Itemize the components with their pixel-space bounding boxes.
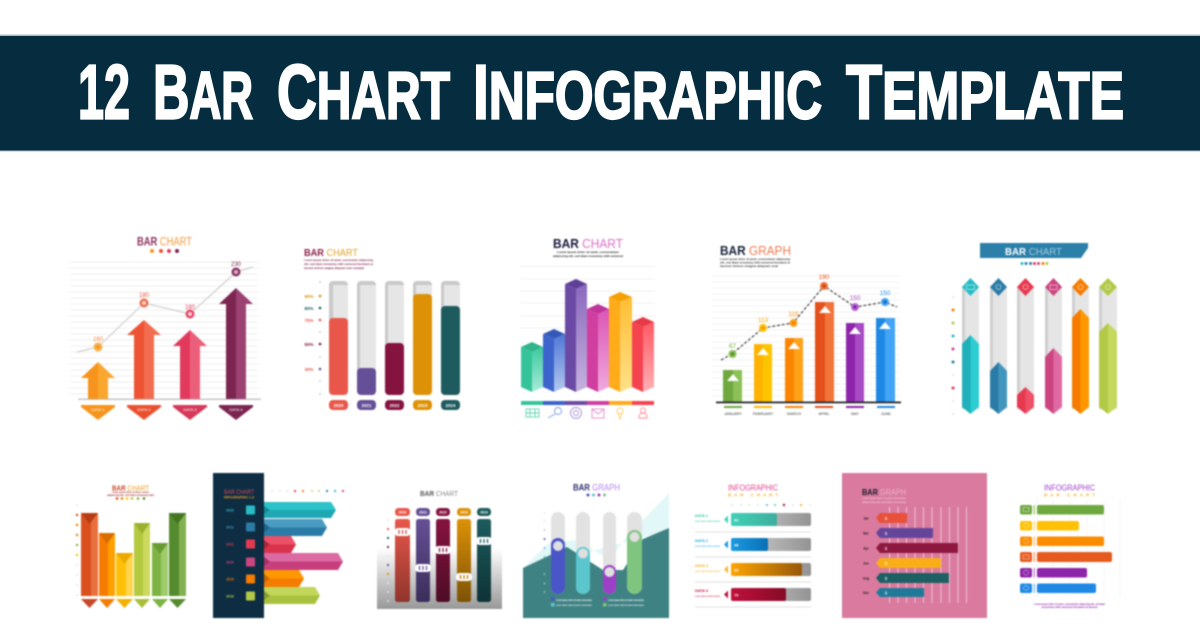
heading dots <box>586 494 606 496</box>
value labels: 115 <box>788 311 799 318</box>
row 1: DATA 1 <box>695 514 708 518</box>
description <box>862 496 907 504</box>
bar icons: $ <box>885 590 888 596</box>
row 1 <box>695 513 811 526</box>
arrow bar 6 <box>264 587 320 604</box>
hex bar 1 <box>962 335 979 414</box>
year pills: 2020 <box>333 403 344 408</box>
scale: 75% <box>304 318 314 323</box>
bar icons: $ <box>885 561 888 566</box>
bar icons: $ <box>885 576 888 581</box>
description <box>107 490 154 497</box>
month legend: FEBRUARY <box>753 412 774 416</box>
arrow bar 4 <box>264 553 343 570</box>
bar 5 <box>152 543 168 596</box>
year pills: 2024 <box>445 403 456 408</box>
teal landscape <box>523 528 669 618</box>
legend: Lorem ipsum dolor sit amet consectetur <box>556 599 592 602</box>
panel heading: INFOGRAPHIC 1-3 <box>224 496 254 500</box>
row labels and icons: 2020 <box>226 560 234 564</box>
bar 2 <box>99 533 115 596</box>
hex bar 6 <box>1099 323 1117 414</box>
chart 12: coloured horizontal bars <box>1020 482 1120 609</box>
heading <box>1044 482 1095 498</box>
row labels: Nov <box>863 591 869 595</box>
category tags: DATA 2 <box>137 407 151 412</box>
description: Lorem ipsum dolor sit amet, consectetuer adipiscing <box>720 257 790 261</box>
category tags: DATA 3 <box>183 407 197 412</box>
pale backdrop <box>523 493 669 570</box>
month legend: JANUARY <box>724 412 742 416</box>
slider handles <box>394 528 492 581</box>
caption: nonummy nibh euismod tincidunt ut laoreet <box>1042 605 1098 609</box>
caption <box>1034 602 1105 609</box>
title <box>78 50 1124 136</box>
value labels: 190 <box>819 274 830 281</box>
value labels: 67 <box>729 343 736 350</box>
title: 12 <box>78 50 130 136</box>
legend: Lorem ipsum dolor sit amet consectetur <box>608 599 644 602</box>
heading: INFOGRAPHIC <box>728 482 778 492</box>
legend: Lorem ipsum dolor sit amet consectetur <box>556 604 592 607</box>
bar 6 <box>169 513 186 596</box>
year pills: 2022 <box>439 510 447 514</box>
bar 3 <box>565 279 587 392</box>
arrow 4 <box>219 288 253 399</box>
scale: 30% <box>304 367 314 372</box>
year pills <box>329 400 460 410</box>
arrow 2 <box>127 320 161 399</box>
icon row <box>526 408 647 419</box>
value labels: 160 <box>93 337 104 343</box>
month legend: MAY <box>851 412 859 416</box>
bars <box>723 302 895 402</box>
heading: BAR CHART <box>1044 492 1095 498</box>
heading: INFOGRAPHIC <box>1044 482 1095 492</box>
year pills: 2023 <box>417 403 428 408</box>
description: Lorem ipsum dolor sit amet consectetur <box>862 496 906 500</box>
trend line <box>77 267 253 352</box>
category tags: DATA 4 <box>229 407 243 412</box>
chart 10: horizontal progress bars <box>695 482 811 607</box>
heading: BAR GRAPH <box>720 243 791 258</box>
bar 4 <box>587 304 609 392</box>
panel heading: BAR CHART <box>224 490 254 496</box>
row 4: 70 <box>734 592 739 598</box>
row 4 <box>695 588 811 601</box>
row labels: Mar <box>863 532 870 536</box>
row 1: Lorem ipsum dolor sit amet <box>695 519 720 523</box>
year pills: 2023 <box>460 510 468 514</box>
year pills: 2024 <box>480 510 488 514</box>
title: BAR <box>153 50 253 136</box>
row labels: Apr <box>863 546 869 550</box>
heading: BAR CHART <box>728 492 778 498</box>
baseline <box>78 398 261 400</box>
row 4: Lorem ipsum dolor sit amet <box>695 594 720 598</box>
row labels and icons <box>226 506 255 600</box>
trend markers <box>94 268 240 352</box>
legend: Lorem ipsum dolor sit amet consectetur <box>608 604 644 607</box>
description: adipiscing elit, sed diam nonummy nibh <box>107 493 154 497</box>
row 2: Lorem ipsum dolor sit amet <box>695 544 720 548</box>
month legend: MARCH <box>787 412 801 416</box>
bar icons: $ <box>885 546 888 551</box>
bar 3 <box>116 553 133 596</box>
row labels and icons: 2021 <box>226 542 234 546</box>
row 3: Lorem ipsum dolor sit amet <box>695 569 720 573</box>
arrow bar 2 <box>264 519 327 536</box>
banner dots <box>1020 262 1048 265</box>
arrow 3 <box>173 330 207 399</box>
chart 11: pink panel bar graph <box>842 473 987 618</box>
value labels <box>729 274 891 350</box>
heading: BAR CHART <box>112 484 149 492</box>
top dots <box>731 504 811 506</box>
description: elit, sed diam nonummy nibh euismod tincidunt ut <box>304 262 373 266</box>
heading: BAR GRAPH <box>573 482 620 492</box>
heading: BAR GRAPH <box>862 487 906 497</box>
banner heading <box>980 243 1088 258</box>
colour strip <box>521 401 654 405</box>
value labels: 150 <box>880 290 891 297</box>
scale <box>304 281 321 395</box>
value labels: 150 <box>850 295 861 302</box>
description: Lorem ipsum dolor sit amet, consectetur adipiscing <box>304 258 373 262</box>
row 3: 90 <box>734 568 739 572</box>
value labels: 180 <box>139 293 150 299</box>
description: laoreet dolore magna aliquam erat volutpat <box>304 266 364 270</box>
category tags: DATA 1 <box>91 407 105 412</box>
gray backdrop <box>377 548 502 609</box>
chart 5: hexagon column chart <box>952 243 1117 415</box>
banner heading: BAR CHART <box>1005 247 1062 258</box>
chart 4: bar and line graph <box>712 243 901 416</box>
legend <box>551 597 644 607</box>
bar icons: $ <box>885 531 888 536</box>
row 2: 45 <box>734 542 739 548</box>
separator ticks <box>1034 505 1035 593</box>
bar 1 <box>81 513 98 596</box>
value labels: 113 <box>758 317 769 324</box>
value labels: 160 <box>185 305 196 311</box>
bottom tags <box>81 599 186 608</box>
month legend: APRIL <box>819 412 829 416</box>
chart 2: progress column chart <box>304 247 460 410</box>
trend markers <box>728 282 889 358</box>
row labels: Jun <box>863 562 869 566</box>
caption: Lorem ipsum dolor sit amet, consectetuer adipiscing elit, sed diam <box>1034 602 1105 606</box>
year pills <box>395 508 491 516</box>
heading: BAR CHART <box>553 237 623 251</box>
hex bar 3 <box>1017 387 1034 414</box>
side dots <box>544 512 546 593</box>
heading dots <box>116 497 145 500</box>
side scale dots <box>952 296 954 415</box>
description: elit, sed diam nonummy nibh euismod tincidunt ut <box>720 260 790 264</box>
bar 6 <box>632 317 654 392</box>
column values <box>329 294 460 395</box>
hex bar 4 <box>1045 348 1062 414</box>
month legend: JUNE <box>881 412 891 416</box>
bar icons <box>885 516 888 596</box>
row labels: Jan <box>863 516 869 520</box>
title: INFOGRAPHIC <box>473 50 822 136</box>
scale: 50% <box>304 342 314 347</box>
title: CHART <box>277 50 450 136</box>
hex bar 2 <box>990 362 1007 414</box>
description <box>553 250 623 258</box>
heading: BAR CHART <box>420 489 458 498</box>
year pills: 2020 <box>399 510 406 514</box>
row 4: DATA 4 <box>695 589 709 593</box>
top dots <box>271 490 344 492</box>
description: adipiscing elit sed diam nonummy <box>862 500 907 504</box>
scale: 80% <box>304 306 314 311</box>
column backgrounds <box>962 287 1117 409</box>
row labels and icons: 2019 <box>226 578 234 582</box>
title: TEMPLATE <box>846 50 1124 136</box>
baseline <box>716 402 901 403</box>
diamond icons <box>962 278 1117 296</box>
heading dots <box>150 249 179 253</box>
side dots <box>387 519 389 602</box>
row labels and icons: 2018 <box>226 594 234 598</box>
row 2: DATA 2 <box>695 539 708 543</box>
chart 9: rounded bars over teal landscape <box>523 482 669 618</box>
row 3 <box>695 563 811 576</box>
bars <box>1037 505 1112 593</box>
chart 7: navy panel horizontal arrows <box>213 473 344 618</box>
capsule knobs <box>553 532 640 577</box>
heading <box>728 482 778 498</box>
row labels: Aug <box>863 576 869 580</box>
chart 3: isometric bars <box>520 237 655 419</box>
arrow bar 5 <box>264 570 304 587</box>
value labels <box>93 262 242 343</box>
capsule tracks <box>551 512 642 594</box>
arrow bar 1 <box>264 502 336 518</box>
description <box>720 257 790 268</box>
panel heading <box>224 490 254 500</box>
row icons <box>1020 505 1032 593</box>
heading: BAR CHART <box>304 247 359 259</box>
side ticks <box>76 504 78 596</box>
bar 5 <box>609 292 632 392</box>
bar icons: $ <box>885 516 888 521</box>
row labels and icons: 2023 <box>226 508 234 512</box>
title banner <box>0 34 1200 152</box>
trend line <box>721 286 897 360</box>
chart 1: arrow bar chart <box>70 236 261 420</box>
capsule values <box>551 530 642 594</box>
heading: BAR CHART <box>137 236 192 248</box>
columns background <box>329 281 460 395</box>
chart 6: warm bar chart <box>76 484 186 608</box>
description: adipiscing elit, sed diam nonummy nibh euismod <box>553 254 623 258</box>
hex bar 5 <box>1072 309 1089 414</box>
bar 4 <box>134 523 150 596</box>
arrow 1 <box>81 362 115 399</box>
description: Lorem ipsum dolor sit amet, consec <box>112 490 149 494</box>
scale: 90% <box>304 294 314 299</box>
row 2 <box>695 538 811 551</box>
bar 2 <box>543 329 565 392</box>
value labels: 230 <box>231 262 242 268</box>
arrow bar 3 <box>264 536 296 553</box>
description: Lorem ipsum dolor sit amet, consectetuer <box>557 250 620 254</box>
description: laoreet dolore magna aliquam erat <box>720 264 778 268</box>
year pills: 2021 <box>419 510 427 514</box>
description <box>304 258 373 270</box>
row 1: 60 <box>734 518 739 522</box>
columns <box>395 519 491 602</box>
row 3: DATA 3 <box>695 564 708 568</box>
row labels and icons: 2022 <box>226 526 234 530</box>
pink panel <box>842 473 987 618</box>
bar 1 <box>521 342 543 392</box>
month legend <box>724 406 895 416</box>
year pills: 2022 <box>389 403 400 408</box>
bar arrow caps <box>727 306 891 381</box>
year pills: 2021 <box>361 403 372 408</box>
row labels <box>863 516 870 595</box>
category tags <box>81 405 253 420</box>
bars <box>876 513 958 597</box>
chart 8: slider columns on gray <box>377 489 502 609</box>
dark panel <box>213 473 264 618</box>
